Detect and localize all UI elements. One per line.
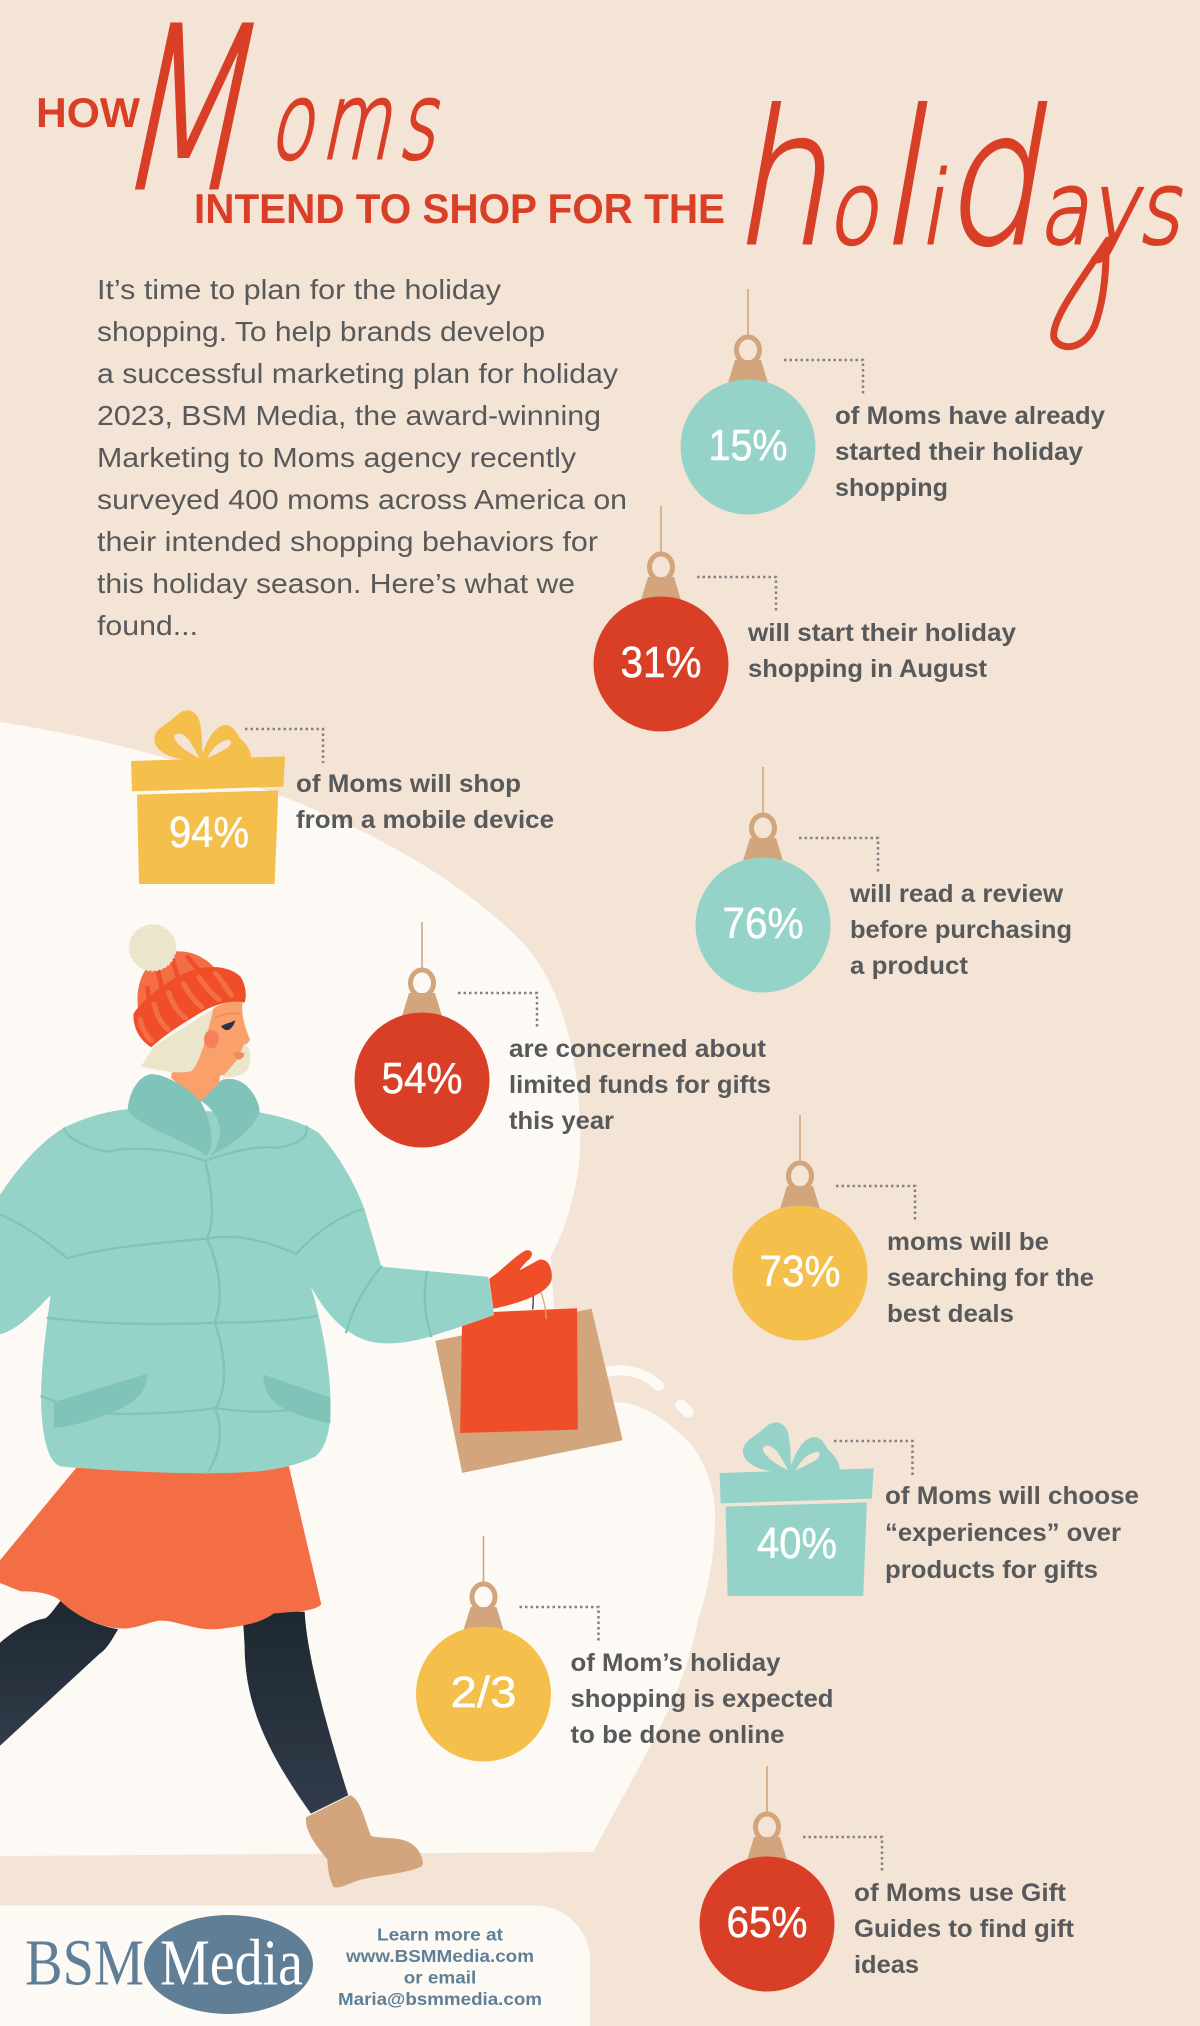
ornament stat: 31%: 31% xyxy=(620,638,702,687)
ornament stat: 65% xyxy=(700,1766,1075,1992)
contact text: Maria@bsmmedia.com xyxy=(338,1989,542,2009)
lips xyxy=(233,1052,245,1060)
hat crown ribs xyxy=(147,955,199,1001)
hair xyxy=(141,1008,213,1072)
ornament stat: 73%: best deals xyxy=(887,1300,1014,1328)
skirt xyxy=(0,1463,321,1629)
ornament stat: 2/3 xyxy=(416,1536,834,1762)
title word: holidays: holidays xyxy=(723,73,1200,287)
ornament stat: 73% xyxy=(732,1115,1094,1340)
ornament stat: 2/3: to be done online xyxy=(570,1721,785,1749)
footer panel xyxy=(0,1906,590,2026)
intro paragraph: shopping. To help brands develop xyxy=(97,316,545,347)
jacket pockets xyxy=(54,1374,330,1428)
cheek xyxy=(204,1030,219,1048)
swash under holidays xyxy=(1054,240,1108,347)
icon: yellow gift box xyxy=(131,710,285,884)
caption xyxy=(885,1482,1139,1584)
contact text: Learn more at xyxy=(377,1924,503,1944)
ornament stat: 65%: Guides to find gift xyxy=(854,1915,1075,1943)
front leg xyxy=(243,1612,348,1814)
white background blob xyxy=(0,722,715,1856)
contact text xyxy=(338,1924,542,2009)
title word: HOW: HOW xyxy=(36,89,140,136)
intro paragraph: this holiday season. Here’s what we xyxy=(97,568,575,599)
ornament stat: 73%: searching for the xyxy=(887,1264,1094,1292)
ornament stat: 76%: 76% xyxy=(722,899,804,948)
ornament stat: 76%: a product xyxy=(850,952,969,980)
intro paragraph: surveyed 400 moms across America on xyxy=(97,484,627,515)
ornament stat: 76%: will read a review xyxy=(849,880,1064,908)
ornament stat: 31% xyxy=(594,506,1016,732)
ornament stat: 54%: are concerned about xyxy=(509,1035,767,1063)
caption: from a mobile device xyxy=(296,806,554,834)
shopping bag: red xyxy=(460,1308,578,1433)
ornament stat: 54%: 54% xyxy=(382,1054,462,1103)
gift stat: 40% xyxy=(720,1422,1139,1596)
caption: “experiences” over xyxy=(885,1519,1121,1547)
jacket seams xyxy=(0,1127,431,1473)
ornament stat: 31%: shopping in August xyxy=(748,655,988,683)
back hair xyxy=(222,1043,251,1078)
ornament stat: 76%: before purchasing xyxy=(850,916,1072,944)
ornament stat: 73%: 73% xyxy=(760,1247,840,1296)
neck and face xyxy=(171,1002,250,1102)
back leg xyxy=(0,1600,118,1746)
contact text: www.BSMMedia.com xyxy=(345,1946,534,1966)
illustration: woman shopping xyxy=(0,925,623,1888)
jacket collar xyxy=(128,1074,260,1156)
ornament stat: 15%: shopping xyxy=(835,474,948,502)
intro paragraph: a successful marketing plan for holiday xyxy=(97,358,618,389)
caption: products for gifts xyxy=(885,1556,1098,1584)
decorative white arc strokes xyxy=(606,1370,688,1412)
caption: of Moms will shop xyxy=(296,770,521,798)
bag handles xyxy=(518,1269,546,1319)
title xyxy=(36,0,1200,347)
logo: BSM Media: Media xyxy=(160,1926,303,2000)
title word: Moms: oms xyxy=(263,62,463,183)
intro paragraph: found... xyxy=(97,610,198,641)
boot xyxy=(306,1795,423,1888)
caption xyxy=(296,770,554,834)
pompom xyxy=(129,925,176,971)
ornament stat: 31%: will start their holiday xyxy=(747,619,1016,647)
ornament stat: 65%: 65% xyxy=(726,1898,808,1947)
title line: intend to shop for the: INTEND TO SHOP FOR THE xyxy=(194,185,725,232)
ornament stat: 2/3: 2/3 xyxy=(450,1668,516,1717)
value: 40% xyxy=(757,1519,837,1568)
ornament stat: 54% xyxy=(354,922,771,1148)
hat crown xyxy=(137,951,216,1009)
ornament stat: 65%: of Moms use Gift xyxy=(854,1879,1067,1907)
logo: BSM Media: BSM xyxy=(25,1926,144,2000)
hat brim xyxy=(133,967,246,1047)
eye xyxy=(221,1020,235,1030)
ornament stat: 73%: moms will be xyxy=(887,1228,1049,1256)
ornament stat: 65%: ideas xyxy=(854,1951,919,1979)
contact text: or email xyxy=(404,1968,476,1988)
eyebrow xyxy=(215,1013,240,1018)
intro paragraph: It’s time to plan for the holiday xyxy=(97,274,501,305)
ornament stat: 2/3: of Mom’s holiday xyxy=(570,1649,781,1677)
ornament stat: 2/3: shopping is expected xyxy=(570,1685,834,1713)
ornament stat: 15%: of Moms have already xyxy=(835,402,1105,430)
intro paragraph: Marketing to Moms agency recently xyxy=(97,442,576,473)
intro paragraph: 2023, BSM Media, the award-winning xyxy=(97,400,601,431)
puffer jacket xyxy=(0,1109,494,1473)
ornament stat: 76% xyxy=(696,767,1072,992)
intro paragraph xyxy=(97,274,627,641)
ornament stat: 54%: this year xyxy=(509,1107,614,1135)
hat brim ribs xyxy=(140,973,231,1041)
upper body xyxy=(0,925,623,1473)
intro paragraph: their intended shopping behaviors for xyxy=(97,526,598,557)
ornament stat: 54%: limited funds for gifts xyxy=(509,1071,771,1099)
ornament stat: 15% xyxy=(680,289,1105,514)
gift stat: 94% xyxy=(131,710,554,884)
shopping bag: tan xyxy=(435,1309,623,1473)
mitten xyxy=(489,1250,552,1309)
ornament stat: 15%: 15% xyxy=(708,421,788,470)
ornament stat: 15%: started their holiday xyxy=(835,438,1083,466)
icon: teal gift box xyxy=(720,1422,874,1596)
caption: of Moms will choose xyxy=(885,1482,1139,1510)
lower body xyxy=(0,1463,423,1888)
value: 94% xyxy=(169,808,249,857)
logo: BSM Media xyxy=(25,1915,313,2014)
